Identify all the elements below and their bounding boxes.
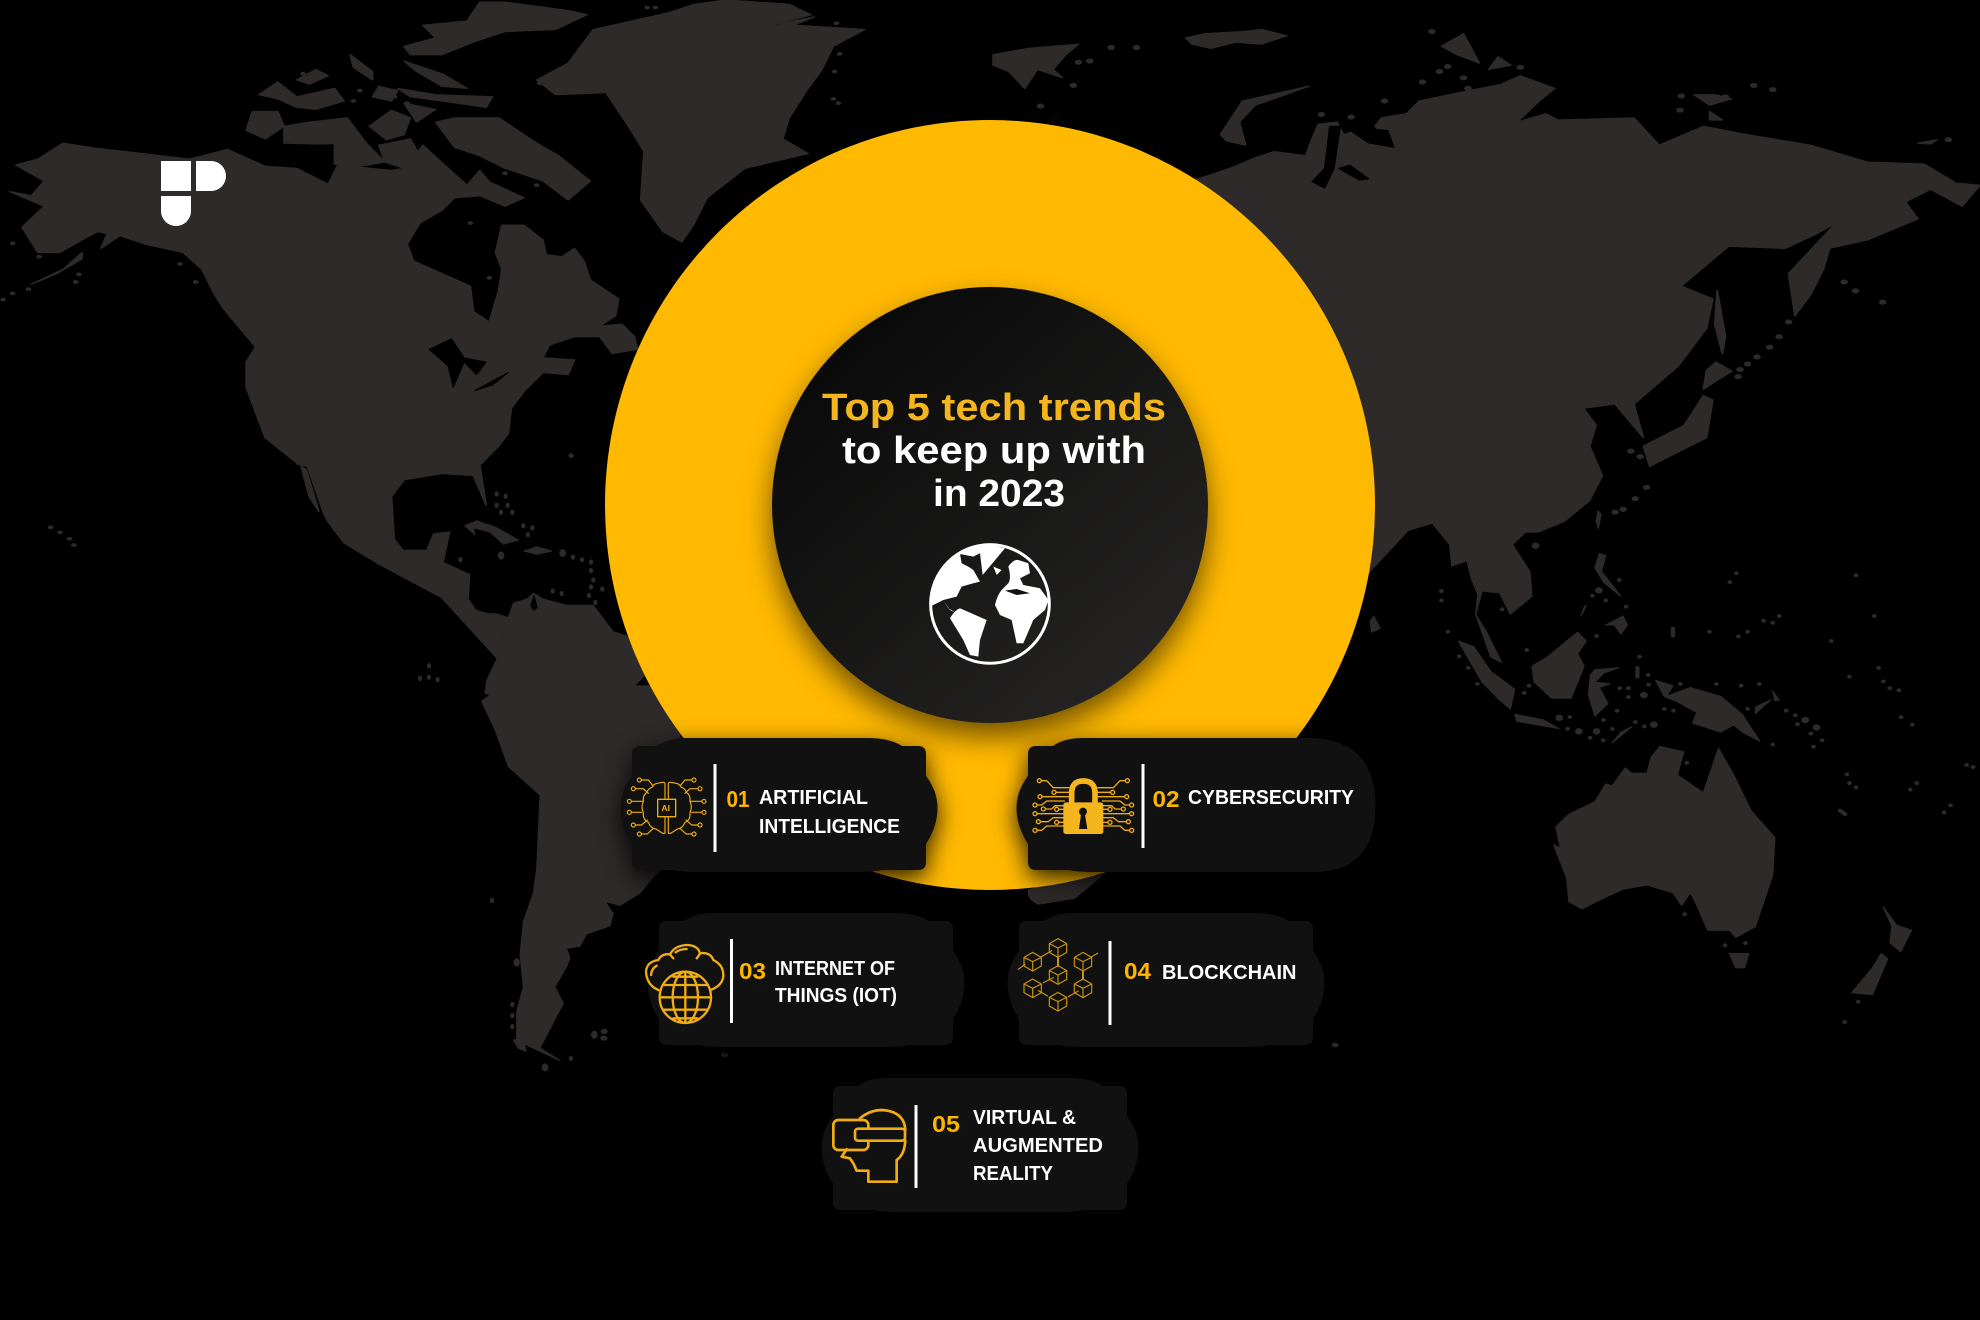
icon: cloud and globe (646, 945, 723, 1023)
label: AUGMENTED (973, 1135, 1103, 1157)
divider (730, 939, 733, 1023)
map: tip of Africa (604, 875, 1335, 1055)
title: in 2023 (933, 473, 1065, 515)
map: Central and South America (380, 456, 680, 1067)
label: VIRTUAL & (973, 1107, 1076, 1129)
title (822, 387, 1166, 515)
card 05: Virtual and Augmented Reality (822, 1078, 1138, 1212)
divider (914, 1105, 918, 1188)
divider (1108, 941, 1112, 1025)
number 01: 01 (726, 786, 750, 812)
label: BLOCKCHAIN (1162, 962, 1296, 984)
label (775, 958, 897, 1007)
yellow circle (605, 120, 1375, 890)
label: ARTIFICIAL (759, 787, 868, 809)
card 01: Artificial Intelligence (620, 738, 938, 872)
map: Eurasia (990, 29, 1980, 512)
number 02: 02 (1152, 786, 1180, 812)
card 02: Cybersecurity (1016, 738, 1376, 872)
number 04: 04 (1124, 958, 1151, 984)
label: REALITY (973, 1163, 1054, 1185)
label: THINGS (IOT) (775, 985, 897, 1007)
card 04: Blockchain (1008, 913, 1324, 1047)
icon: AI brain: AI (661, 803, 670, 813)
icon: globe (930, 544, 1049, 663)
number 05: 05 (932, 1111, 960, 1137)
label: INTELLIGENCE (759, 816, 900, 838)
number 03: 03 (739, 958, 766, 984)
icon: AI brain (627, 778, 706, 836)
central dark circle (772, 287, 1208, 723)
title: Top 5 tech trends (822, 387, 1166, 429)
icon: padlock with circuits (1033, 779, 1134, 834)
icon: blockchain cubes (1018, 939, 1098, 1011)
label (759, 787, 900, 838)
icon: VR headset (833, 1110, 905, 1182)
label: CYBERSECURITY (1188, 787, 1355, 809)
label: INTERNET OF (775, 958, 895, 980)
label (973, 1107, 1103, 1185)
map: South East Asia, Australia and Oceania (1343, 500, 1973, 1022)
logo (161, 161, 226, 226)
map: North America and Greenland (3, 0, 865, 660)
title: to keep up with (842, 430, 1146, 472)
divider (714, 764, 716, 852)
divider (1142, 764, 1144, 848)
card 03: Internet of Things (646, 913, 964, 1047)
